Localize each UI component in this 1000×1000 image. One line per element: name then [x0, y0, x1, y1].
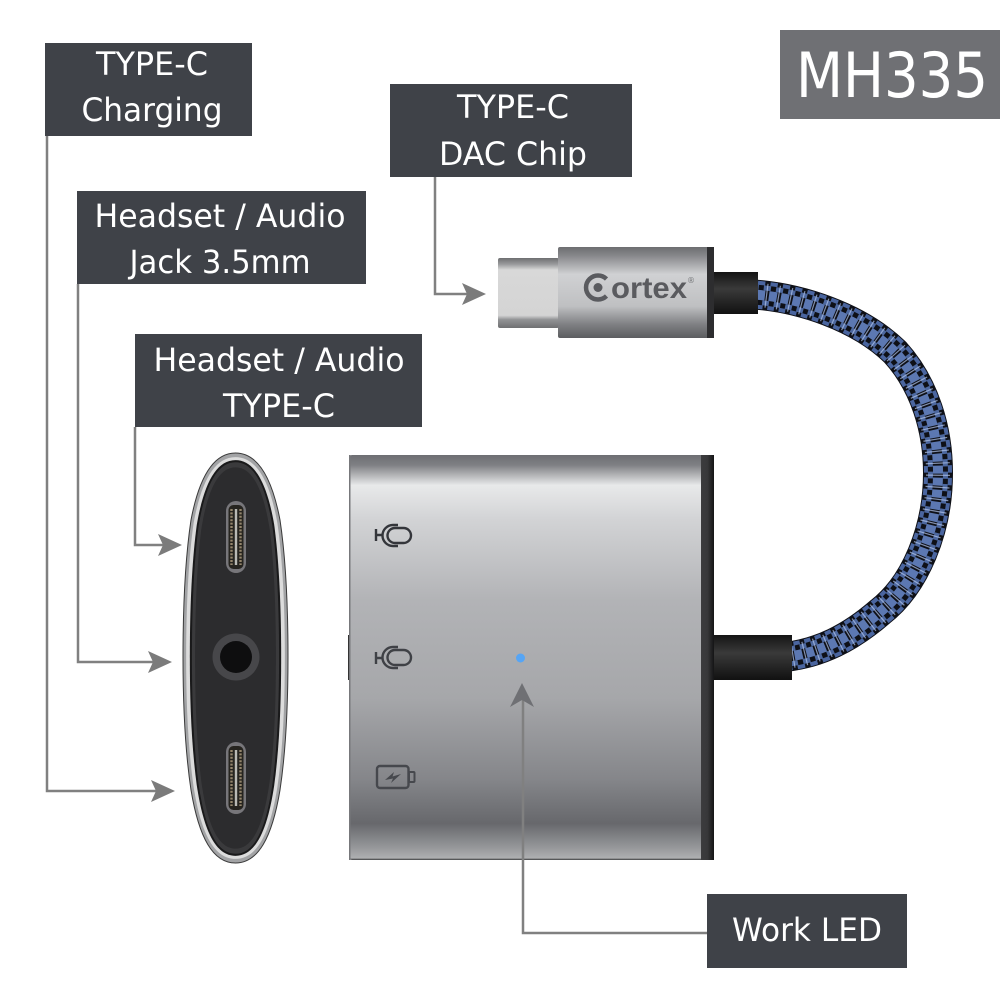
strain relief — [714, 272, 758, 314]
black end strip — [701, 455, 714, 860]
label: TYPE-C DAC Chip: TYPE-C — [456, 88, 569, 126]
callout leader: TYPE-C Charging — [47, 136, 175, 802]
registered mark: ® — [687, 276, 695, 285]
label: Work LED: Work LED — [732, 911, 882, 949]
label: Headset / Audio Jack 3.5mm: Headset / Audio — [94, 197, 346, 235]
inner dark face — [195, 467, 276, 849]
Work LED leader arrow — [510, 683, 707, 933]
callout leader: DAC Chip — [435, 177, 486, 305]
logo mark — [586, 276, 606, 300]
light inner rim — [186, 457, 285, 859]
black line — [190, 460, 281, 856]
label: Work LED — [707, 894, 907, 968]
icon: charging battery — [377, 766, 414, 788]
dark face — [192, 462, 279, 854]
connector housing — [558, 247, 714, 338]
label: Headset / Audio Jack 3.5mm: Jack 3.5mm — [128, 243, 310, 281]
connector plug — [498, 258, 559, 328]
label: TYPE-C DAC Chip: DAC Chip — [439, 135, 587, 173]
bottom strain relief — [705, 635, 792, 680]
USB-C connector with Cortex branding — [498, 247, 758, 338]
icon: headset port 2 — [376, 647, 411, 668]
outer rim — [183, 453, 288, 863]
label: Headset / Audio TYPE-C — [135, 334, 422, 427]
adapter body — [348, 455, 714, 860]
work LED — [516, 654, 525, 662]
brand name: ortex — [611, 272, 687, 305]
braided cable — [745, 294, 938, 657]
side view of ports — [183, 453, 288, 863]
port: lower USB-C — [226, 742, 246, 814]
label: TYPE-C Charging: Charging — [82, 91, 222, 129]
label: Headset / Audio TYPE-C: TYPE-C — [222, 387, 335, 425]
label: TYPE-C Charging — [45, 43, 252, 136]
label: TYPE-C DAC Chip — [390, 84, 632, 177]
port: 3.5mm jack — [212, 634, 260, 680]
label: Headset / Audio TYPE-C: Headset / Audio — [154, 341, 404, 379]
label: TYPE-C Charging: TYPE-C — [95, 45, 208, 83]
callout leader: Headset / Audio TYPE-C — [135, 427, 182, 556]
label: Headset / Audio Jack 3.5mm — [77, 191, 366, 284]
port: upper USB-C — [226, 501, 246, 573]
icon: headset port 1 — [376, 525, 411, 546]
callout leader: Headset / Audio Jack — [78, 284, 172, 673]
